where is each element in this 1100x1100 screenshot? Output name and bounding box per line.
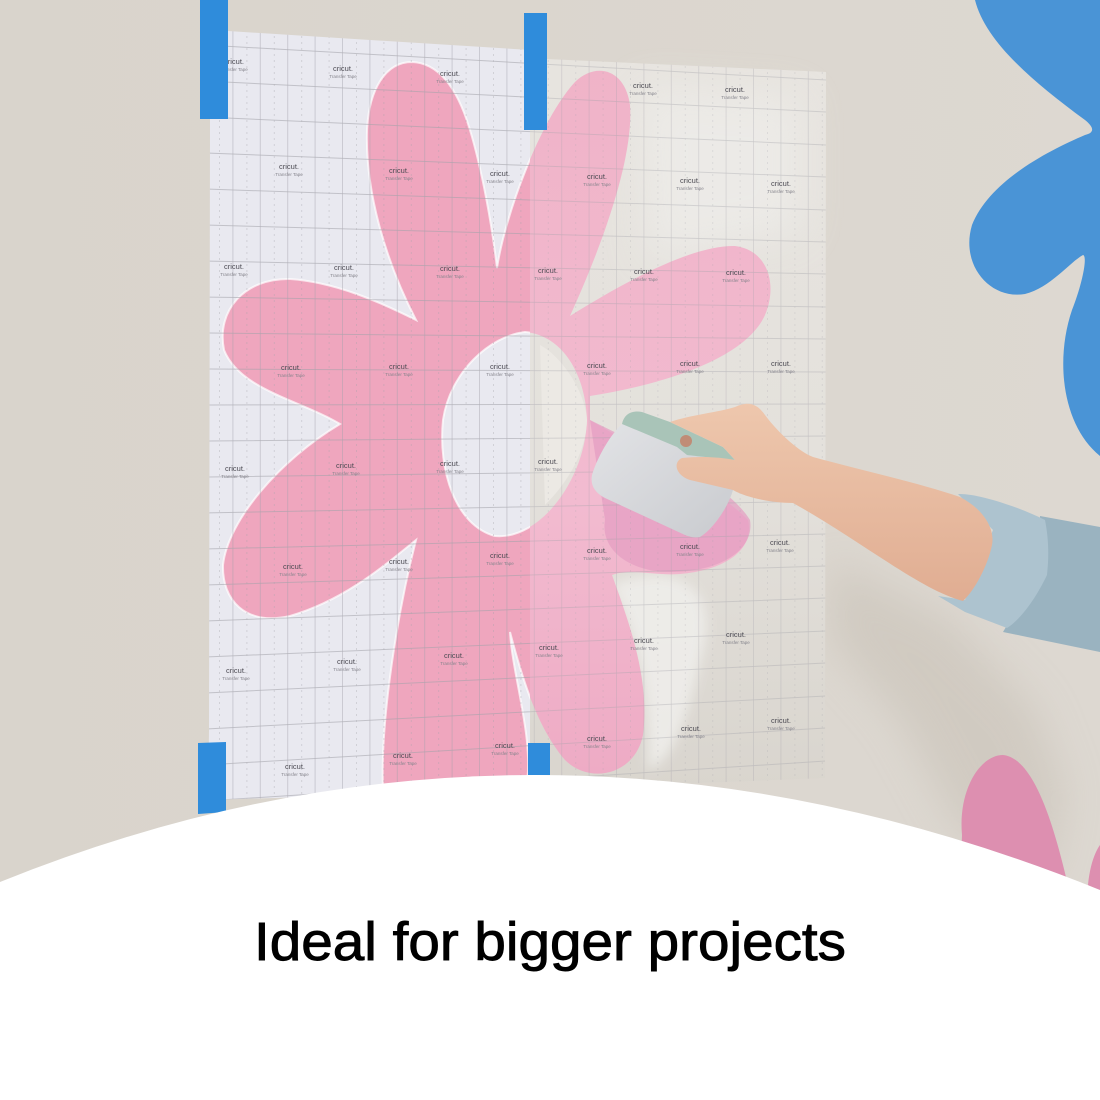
cricut watermarks: cricut. xyxy=(389,362,409,371)
cricut watermarks: Transfer Tape xyxy=(436,79,464,84)
cricut watermarks: Transfer Tape xyxy=(767,189,795,194)
cricut watermarks: cricut. xyxy=(495,741,515,750)
cricut watermarks: cricut. xyxy=(281,363,301,372)
scraper tool xyxy=(592,412,735,537)
cricut watermarks: cricut. xyxy=(285,762,305,771)
cricut watermarks: cricut. xyxy=(336,461,356,470)
cricut watermarks: Transfer Tape xyxy=(767,726,795,731)
cricut watermarks: cricut. xyxy=(770,538,790,547)
scraper mint handle xyxy=(622,412,735,460)
cricut watermarks: Transfer Tape xyxy=(221,474,249,479)
cricut watermarks: cricut. xyxy=(681,724,701,733)
cricut watermarks: cricut. xyxy=(490,362,510,371)
cricut watermarks: cricut. xyxy=(279,162,299,171)
cricut watermarks: Transfer Tape xyxy=(676,552,704,557)
flower centre gloss xyxy=(540,345,587,505)
cricut watermarks: Transfer Tape xyxy=(534,276,562,281)
right sheet grid lines xyxy=(530,60,826,783)
cricut watermarks: Transfer Tape xyxy=(767,369,795,374)
white curved caption panel xyxy=(0,775,1100,1100)
cricut watermarks: cricut. xyxy=(490,169,510,178)
left sheet grid lines xyxy=(209,31,530,800)
cricut watermarks: Transfer Tape xyxy=(330,273,358,278)
cricut watermarks: Transfer Tape xyxy=(486,179,514,184)
cricut watermarks: Transfer Tape xyxy=(630,277,658,282)
cricut watermarks: Transfer Tape xyxy=(722,640,750,645)
flower left half xyxy=(222,61,530,784)
cricut watermarks: cricut. xyxy=(224,57,244,66)
handle hole xyxy=(680,435,692,447)
cricut watermarks: cricut. xyxy=(680,359,700,368)
cricut watermarks: cricut. xyxy=(224,262,244,271)
rolled cuff xyxy=(938,494,1048,628)
cricut watermarks: cricut. xyxy=(587,734,607,743)
cricut watermarks: cricut. xyxy=(539,643,559,652)
cricut watermarks: cricut. xyxy=(771,179,791,188)
cricut watermarks: Transfer Tape xyxy=(676,186,704,191)
scraper blade xyxy=(592,424,733,537)
cricut watermarks: Transfer Tape xyxy=(766,548,794,553)
cricut watermarks: cricut. xyxy=(440,459,460,468)
cricut watermarks: cricut. xyxy=(680,176,700,185)
cricut watermarks: cricut. xyxy=(283,562,303,571)
cricut watermarks: Transfer Tape xyxy=(436,469,464,474)
cricut watermarks: Transfer Tape xyxy=(486,561,514,566)
cricut watermarks: cricut. xyxy=(633,81,653,90)
pink flower on wall xyxy=(960,755,1100,895)
blue flower on wall xyxy=(969,0,1100,456)
cricut watermarks: cricut. xyxy=(440,69,460,78)
cricut watermarks: cricut. xyxy=(389,166,409,175)
cricut watermarks: cricut. xyxy=(226,666,246,675)
cricut watermarks: cricut. xyxy=(634,636,654,645)
cricut watermarks: cricut. xyxy=(725,85,745,94)
cricut watermarks: cricut. xyxy=(587,546,607,555)
cricut watermarks: Transfer Tape xyxy=(583,556,611,561)
cricut watermarks: cricut. xyxy=(389,557,409,566)
cricut watermarks: Transfer Tape xyxy=(275,172,303,177)
cricut watermarks: Transfer Tape xyxy=(389,761,417,766)
cricut watermarks: Transfer Tape xyxy=(332,471,360,476)
cricut watermarks: cricut. xyxy=(440,264,460,273)
cricut watermarks: Transfer Tape xyxy=(677,734,705,739)
arm shadow on wall xyxy=(830,560,1065,880)
cricut watermarks: Transfer Tape xyxy=(534,467,562,472)
cricut watermarks: cricut. xyxy=(634,267,654,276)
film highlights xyxy=(612,90,800,770)
cricut watermarks: Transfer Tape xyxy=(535,653,563,658)
cricut watermarks: Transfer Tape xyxy=(583,371,611,376)
cricut watermarks: Transfer Tape xyxy=(385,176,413,181)
cricut watermarks: cricut. xyxy=(726,268,746,277)
cricut watermarks: cricut. xyxy=(771,716,791,725)
left transfer sheet xyxy=(208,31,530,800)
cricut watermarks: cricut. xyxy=(680,542,700,551)
cricut watermarks: cricut. xyxy=(334,263,354,272)
cricut watermarks: cricut. xyxy=(333,64,353,73)
cricut watermarks: Transfer Tape xyxy=(220,67,248,72)
cricut watermarks: Transfer Tape xyxy=(385,567,413,572)
cricut watermarks: Transfer Tape xyxy=(486,372,514,377)
cricut watermarks: Transfer Tape xyxy=(583,182,611,187)
cricut watermarks: cricut. xyxy=(444,651,464,660)
cricut watermarks: Transfer Tape xyxy=(676,369,704,374)
cricut watermarks: cricut. xyxy=(337,657,357,666)
cricut watermarks: Transfer Tape xyxy=(630,646,658,651)
rolled sleeve and shirt xyxy=(938,494,1100,652)
cricut watermarks: Transfer Tape xyxy=(436,274,464,279)
cricut watermarks: Transfer Tape xyxy=(220,272,248,277)
cricut watermarks: cricut. xyxy=(225,464,245,473)
cricut watermarks: Transfer Tape xyxy=(721,95,749,100)
cricut watermarks: cricut. xyxy=(490,551,510,560)
cricut watermarks: cricut. xyxy=(538,266,558,275)
title: Ideal for bigger projects xyxy=(254,912,846,972)
cricut watermarks: Transfer Tape xyxy=(333,667,361,672)
cricut watermarks: Transfer Tape xyxy=(491,751,519,756)
cricut watermarks: Transfer Tape xyxy=(440,661,468,666)
cricut watermarks: cricut. xyxy=(538,457,558,466)
hand and forearm xyxy=(670,404,993,601)
cricut watermarks: Transfer Tape xyxy=(629,91,657,96)
cricut watermarks: Transfer Tape xyxy=(222,676,250,681)
cricut watermarks: cricut. xyxy=(587,172,607,181)
cricut watermarks: cricut. xyxy=(587,361,607,370)
blue painter's tape xyxy=(198,0,550,814)
cricut watermarks: Transfer Tape xyxy=(385,372,413,377)
cricut watermarks: Transfer Tape xyxy=(329,74,357,79)
cricut watermarks: Transfer Tape xyxy=(281,772,309,777)
shirt body xyxy=(1003,516,1100,652)
darker pink under scraper xyxy=(590,420,750,572)
flower decal xyxy=(223,62,771,790)
cricut watermarks xyxy=(220,57,795,777)
cricut watermarks: cricut. xyxy=(393,751,413,760)
right transfer sheet xyxy=(525,58,826,790)
cricut watermarks: Transfer Tape xyxy=(277,373,305,378)
cricut watermarks: cricut. xyxy=(771,359,791,368)
cricut watermarks: Transfer Tape xyxy=(279,572,307,577)
cricut watermarks: Transfer Tape xyxy=(722,278,750,283)
cricut watermarks: cricut. xyxy=(726,630,746,639)
flower right half xyxy=(530,70,770,774)
cricut watermarks: Transfer Tape xyxy=(583,744,611,749)
